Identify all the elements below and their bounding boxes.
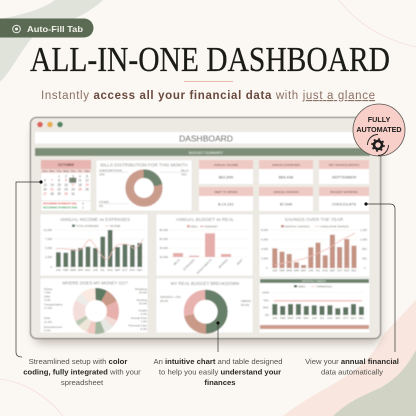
bar chart: savings [272, 235, 356, 268]
panel: calendar: 12 [85, 178, 89, 182]
panel: calendar: 19 [85, 183, 89, 187]
panel: savings over the year [259, 214, 370, 277]
budget summary bar: BUDGET SUMMARY [189, 151, 224, 155]
caption: right: View your annual financial [305, 357, 399, 366]
panel: calendar: 18 [78, 183, 82, 187]
panel: calendar: RECURRING PAYMENTS DUE [43, 202, 77, 206]
panel: annual income vs expenses: APR [78, 268, 83, 272]
background blob: bottom-right pink [283, 300, 416, 416]
panel: monthly needs: SEP [335, 316, 341, 320]
card: annual savings: $7,648 [280, 202, 293, 206]
panel: where does my money go: 5.2% [44, 328, 51, 332]
panel: bills distribution: OTHER [99, 200, 109, 204]
bar chart: needs [272, 304, 364, 315]
panel: monthly needs: 0% [265, 313, 270, 317]
window shadow [34, 125, 380, 343]
card: debt to spend [199, 187, 253, 211]
panel: calendar: 28 [50, 192, 54, 196]
panel: savings over the year: SEP [330, 268, 335, 272]
panel: my real budget breakdown: SAVINGS + INV. [160, 295, 181, 299]
panel: monthly needs: FEB [280, 316, 285, 320]
dashboard heading: DASHBOARD [179, 134, 233, 144]
panel: calendar: 1 [58, 174, 60, 178]
panel: calendar: 7 [51, 178, 53, 182]
panel: annual income vs expenses: JUL [100, 268, 106, 272]
panel: savings over the year: MONTHLY SAVINGS [285, 224, 310, 228]
panel: annual budget vs real [156, 214, 253, 276]
connector: center [216, 321, 220, 352]
panel: calendar: RECURRING PAYMENTS PAID [43, 206, 77, 210]
panel: calendar: 10 [71, 178, 75, 182]
panel: where does my money go: 7.2% [140, 320, 147, 324]
panel: calendar: 27 [43, 192, 47, 196]
panel: annual budget vs real: 40,000 [159, 246, 168, 250]
budget summary bar [35, 148, 370, 156]
panel: calendar: 5 [86, 174, 88, 178]
dashboard window [30, 118, 380, 338]
panel: annual budget vs real: ANNUAL BUDGET vs REAL [176, 217, 234, 222]
card: biggest expense: BIGGEST EXPENSE [330, 190, 358, 194]
panel: monthly needs: OCT [343, 316, 349, 320]
panel: annual income vs expenses: ANNUAL INCOME vs EXPENSES [60, 217, 130, 222]
panel: my real budget breakdown [156, 278, 253, 333]
card: debt to spend: $-14,191 [218, 202, 235, 206]
panel: savings over the year: APR [294, 268, 299, 272]
panel: monthly needs: JAN [272, 316, 277, 320]
panel: savings over the year: AUG [322, 268, 328, 272]
caption: left: Streamlined setup with color [29, 357, 127, 366]
panel: savings over the year: CUMULATIVE SAVINGS [320, 224, 349, 228]
caption: center [153, 357, 283, 387]
caption: center: to help you easily understand your [159, 368, 281, 376]
panel: my real budget breakdown: 50.0% [241, 303, 250, 307]
caption: center: An intuitive chart and table designed [153, 357, 283, 366]
panel: monthly needs: NOV [351, 316, 357, 320]
panel: monthly needs: 100% [262, 290, 270, 294]
panel: my real budget breakdown: 28.2% [160, 299, 169, 303]
panel: annual income vs expenses: DEC [137, 268, 143, 272]
panel: monthly needs: 75% [263, 298, 269, 302]
panel: bills distribution: 24% [99, 172, 105, 176]
panel: annual income vs expenses: INCOME [110, 224, 121, 228]
card: net savings month: SEPTEMBER [332, 174, 356, 180]
panel: where does my money go: Debt [44, 316, 50, 320]
panel: where does my money go: Gifts [44, 294, 50, 298]
dashboard heading [35, 132, 373, 144]
panel: annual income vs expenses: JAN [56, 268, 61, 272]
panel: calendar: 23 [64, 188, 68, 192]
panel: where does my money go: Dining [44, 287, 53, 291]
panel: monthly needs: MAR [288, 316, 294, 320]
panel: monthly needs: NEED [298, 284, 305, 288]
panel: where does my money go: 10.0% [139, 290, 147, 294]
panel: annual income vs expenses: 7,500 [45, 237, 52, 241]
panel: savings over the year: 2,000 [261, 256, 268, 260]
panel: savings over the year: JUN [308, 268, 313, 272]
panel: calendar: 8 [58, 178, 60, 182]
panel: bills distribution: 76% [181, 172, 187, 176]
panel: annual income vs expenses: TOTAL EXPENSES [76, 224, 99, 228]
panel: annual budget vs real: BILLS [172, 258, 181, 266]
panel: monthly needs: THRESHOLD [316, 284, 332, 288]
panel: savings over the year: 1,200 [360, 228, 367, 232]
panel: calendar: 2 [65, 174, 67, 178]
panel: savings over the year: 6,000 [261, 238, 268, 242]
panel: savings over the year: 0 [364, 266, 366, 270]
panel: calendar: 17 [71, 183, 75, 187]
panel: calendar: 26 [85, 188, 89, 192]
panel: annual income vs expenses: JUN [93, 268, 98, 272]
caption: right: data automatically [321, 368, 383, 376]
panel: calendar: 11 [78, 178, 82, 182]
panel: calendar: 21 [50, 188, 54, 192]
panel: where does my money go: 11.0% [44, 320, 52, 324]
panel: bills distribution: BILLS [181, 168, 189, 172]
panel: calendar: Thu [71, 169, 76, 173]
caption: left [23, 357, 141, 387]
panel: annual income vs expenses [40, 214, 148, 276]
panel: calendar: 13 [43, 183, 47, 187]
panel: where does my money go: 7.9% [44, 290, 51, 294]
panel: monthly needs: AUG [327, 316, 333, 320]
panel: calendar: Wed [63, 169, 69, 173]
panel: annual budget vs real: SAVINGS [217, 258, 229, 269]
panel: where does my money go: Housing [136, 298, 147, 302]
panel: calendar: 25 [78, 188, 82, 192]
bar chart: expenses [56, 230, 142, 267]
line: cumulative [275, 233, 355, 265]
background blob: bottom-right sage [333, 350, 416, 416]
background arc: bottom-left [0, 379, 63, 416]
icon: gear [368, 134, 388, 156]
card: annual income: $62,895 [219, 174, 234, 180]
panel: calendar: Sat [85, 169, 89, 173]
panel: calendar: 22 [57, 188, 61, 192]
panel: calendar: OCTOBER [58, 163, 75, 167]
panel: annual budget vs real: $ BUDGET [205, 224, 218, 228]
card: net savings month: NET SAVINGS MONTH [329, 163, 359, 167]
badge: fully automated: AUTOMATED [356, 125, 402, 134]
panel: annual income vs expenses: 10,000 [43, 228, 52, 232]
panel: monthly needs: 50% [263, 306, 269, 310]
panel: bills distribution [96, 160, 192, 211]
panel: annual income vs expenses: NOV [129, 268, 135, 272]
panel: savings over the year: 4,000 [261, 247, 268, 251]
footer bar [260, 325, 369, 329]
connector: right [364, 202, 395, 352]
panel: where does my money go: 4.2% [140, 312, 147, 316]
panel: savings over the year: 200 [362, 256, 367, 260]
badge: fully automated [353, 104, 405, 156]
panel: savings over the year: 8,000 [261, 228, 268, 232]
connector: left [16, 180, 43, 357]
panel: where does my money go: Entertainment [44, 325, 62, 329]
panel: monthly needs: DEC [359, 316, 364, 320]
panel: bills distribution: 0% [99, 204, 104, 208]
panel: savings over the year: FEB [279, 268, 285, 272]
panel: calendar: 24 [71, 188, 75, 192]
card: debt to spend: DEBT TO SPEND [214, 190, 238, 194]
panel: calendar: 3 [72, 174, 74, 178]
window controls [37, 122, 63, 127]
panel: calendar: 4 [82, 202, 84, 206]
caption: left: coding, fully integrated with your [23, 368, 141, 376]
panel: annual budget vs real: 80,000 [159, 228, 168, 232]
panel: bills distribution: BILLS DISTRIBUTION FOR THIS MONTH [101, 162, 187, 168]
panel: monthly needs: APR [296, 316, 301, 320]
title rule [184, 81, 233, 82]
panel: where does my money go: Health [139, 308, 147, 312]
panel: annual budget vs real: EXPENSES [182, 258, 196, 271]
line: income [56, 239, 143, 259]
panel: monthly needs: JUL [320, 316, 325, 320]
panel: savings over the year: OCT [337, 268, 343, 272]
card: annual expenses: $69,438 [279, 174, 294, 180]
panel: calendar: 6 [44, 178, 46, 182]
panel: calendar: Mon [49, 169, 55, 173]
panel: savings over the year: 1,000 [360, 238, 367, 242]
panel: where does my money go: WHERE DOES MY MONEY GO? [62, 280, 128, 286]
panel: where does my money go: Shopping [135, 287, 147, 291]
caption: right [305, 357, 399, 376]
panel: annual income vs expenses: AUG [107, 268, 113, 272]
panel: monthly needs: MONTHLY NEEDS [302, 279, 326, 283]
panel: where does my money go: 17.0% [44, 306, 53, 310]
badge: Auto-Fill Tab: Auto-Fill Tab [27, 24, 83, 34]
panel: savings over the year: JUL [316, 268, 321, 272]
panel: annual budget vs real: DEBT [236, 258, 244, 266]
panel: calendar: 1 [82, 206, 84, 210]
panel: annual budget vs real: REAL [191, 224, 198, 228]
panel: annual income vs expenses: FEB [63, 268, 68, 272]
panel: savings over the year: NOV [344, 268, 350, 272]
chart: money donut [79, 294, 113, 328]
panel: my real budget breakdown: NEEDS [241, 299, 251, 303]
panel: where does my money go: Personal Care [129, 324, 147, 328]
panel: monthly needs [259, 278, 370, 333]
panel: savings over the year: JAN [272, 268, 277, 272]
card: annual expenses [259, 160, 313, 184]
panel: calendar: 20 [43, 188, 47, 192]
background arc: top-right [339, 0, 416, 47]
threshold line [274, 300, 362, 302]
panel: where does my money go: Annual Fees [131, 316, 148, 320]
chart: bills donut [130, 174, 158, 202]
panel: where does my money go [40, 278, 148, 333]
panel: savings over the year: DEC [351, 268, 357, 272]
card: annual income: ANNUAL INCOME [214, 163, 238, 167]
card: annual savings [259, 187, 313, 211]
summary cards [199, 160, 369, 211]
badge: fully automated: FULLY [368, 115, 390, 124]
card: biggest expense [319, 187, 369, 211]
panel: annual income vs expenses: SEP [115, 268, 120, 272]
panel: my real budget breakdown: MY REAL BUDGET BREAKDOWN [171, 281, 239, 286]
card: annual savings: ANNUAL SAVINGS [273, 190, 299, 194]
caption: center: finances [204, 378, 236, 387]
panel: monthly needs: JUN [312, 316, 317, 320]
panel: calendar: 15 [57, 183, 61, 187]
panel: calendar: 29 [57, 192, 61, 196]
panel: annual income vs expenses: 5,000 [45, 246, 52, 250]
card: net savings month [319, 160, 369, 184]
caption: left: spreadsheet [61, 378, 104, 387]
panel: monthly needs: MAY [304, 316, 309, 320]
panel: calendar [41, 160, 91, 211]
bar chart: budget [173, 233, 231, 257]
subtitle: Instantly access all your financial data with just a glance [41, 90, 375, 102]
card: annual expenses: ANNUAL EXPENSES [272, 163, 300, 167]
panel: calendar: Fri [78, 169, 82, 173]
panel: savings over the year: MAY [301, 268, 307, 272]
background blob: top-left sage [0, 0, 103, 82]
panel: where does my money go: Transportation [44, 302, 63, 306]
panel: calendar: Tue [57, 169, 62, 173]
panel: savings over the year: 0 [266, 266, 268, 270]
panel: bills distribution: SUBSCRIPTIONS [99, 168, 122, 172]
card: biggest expense: CHOCOLATE [332, 202, 357, 206]
panel: savings over the year: SAVINGS OVER THE YEAR [285, 217, 344, 222]
card: annual income [199, 160, 253, 184]
panel: calendar: 9 [65, 178, 67, 182]
panel: where does my money go: 8.2% [140, 327, 147, 331]
panel: calendar: 4 [79, 174, 81, 178]
panel: annual income vs expenses: 0 [50, 265, 52, 269]
panel: where does my money go: 24.0% [139, 302, 147, 306]
panel: savings over the year: 500 [362, 247, 367, 251]
panel: calendar: 31 [71, 192, 75, 196]
panel: annual budget vs real: INVESTMENTS [196, 258, 213, 275]
panel: annual income vs expenses: 2,500 [45, 255, 52, 259]
panel: annual budget vs real: 20,000 [159, 255, 168, 259]
chart: budget donut [189, 295, 223, 329]
panel: calendar: 30 [64, 192, 68, 196]
panel: calendar: 16 [64, 183, 68, 187]
panel: calendar: Sun [43, 169, 48, 173]
panel: annual income vs expenses: MAY [85, 268, 91, 272]
badge: Auto-Fill Tab [0, 18, 94, 38]
panel: annual income vs expenses: MAR [70, 268, 76, 272]
panel: annual budget vs real: 60,000 [159, 237, 168, 241]
panel: calendar: 14 [50, 183, 54, 187]
panel: savings over the year: MAR [286, 268, 292, 272]
panel: annual income vs expenses: OCT [122, 268, 128, 272]
panel: where does my money go: 4.2% [44, 298, 51, 302]
